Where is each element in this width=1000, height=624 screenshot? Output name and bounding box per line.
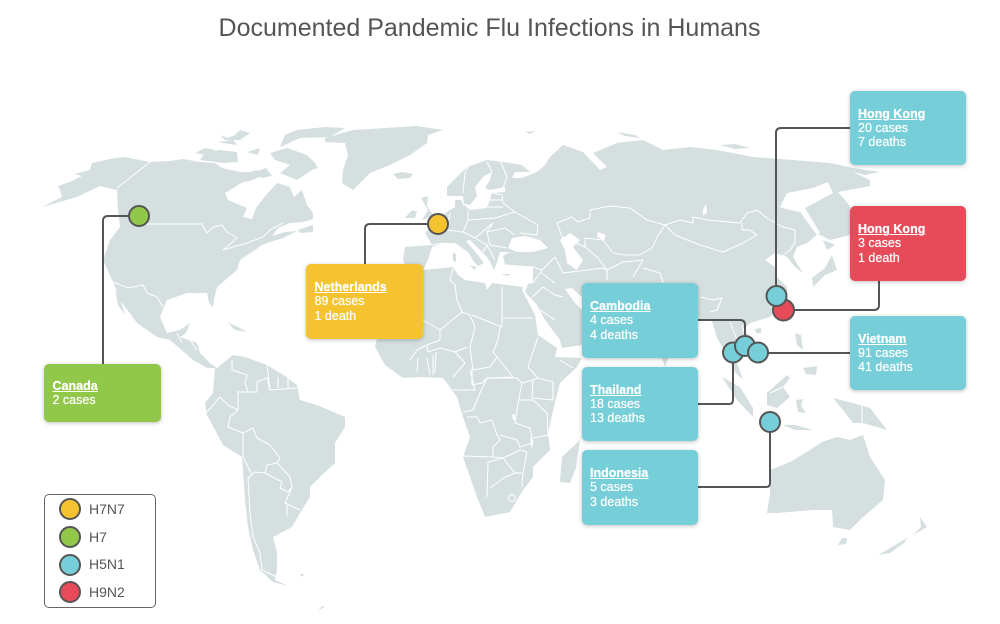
connector: Indonesia [698,422,770,487]
marker: Hong Kong H5N1 [766,286,786,306]
connector: Netherlands [365,224,438,264]
callout: Cambodia [582,283,698,358]
callout: Hong Kong H5N1: 7 deaths [858,135,906,149]
legend entries [59,498,125,603]
callout: Hong Kong H9N2: 1 death [858,251,900,265]
callout: Thailand: Thailand [590,383,641,397]
callout: Hong Kong H9N2: Hong Kong [858,222,925,236]
callout: Cambodia: Cambodia [590,299,650,313]
callout: Vietnam: 91 cases [858,346,908,360]
legend swatch: H9N2 [60,582,80,602]
callout: Indonesia: 5 cases [590,480,633,494]
marker: Vietnam H5N1 [748,342,768,362]
callout: Hong Kong H5N1: Hong Kong [858,107,925,121]
legend label: H5N1: H5N1 [89,556,125,572]
legend label: H9N2: H9N2 [89,584,125,600]
marker: Netherlands H7N7 [428,214,448,234]
callout: Netherlands: 1 death [314,309,356,323]
Africa [375,267,582,517]
callout: Canada [44,364,160,422]
callout: Netherlands: Netherlands [314,280,387,294]
marker: Hong Kong H9N2 [773,300,794,320]
callout: Cambodia: 4 cases [590,313,633,327]
callout: Indonesia: 3 deaths [590,495,638,509]
title: Documented Pandemic Flu Infections in Humans [219,14,760,42]
connector: Canada [103,216,139,364]
callout: Netherlands: 89 cases [314,294,365,308]
marker: Thailand H5N1 [723,342,743,362]
legend swatch: H7N7 [60,499,80,519]
callout: Hong Kong H9N2: 3 cases [858,236,901,250]
callout: Hong Kong H5N1 [850,91,966,165]
connector: Vietnam [758,352,850,354]
marker: Indonesia H5N1 [760,412,780,432]
callout: Thailand: 18 cases [590,397,640,411]
Eurasia [403,140,880,380]
callout: Vietnam: Vietnam [858,332,906,346]
callout: Cambodia: 4 deaths [590,328,638,342]
country borders [113,160,862,577]
legend label: H7: H7 [89,529,107,545]
callout: Canada: 2 cases [52,393,96,407]
connector: Hong Kong H5N1 [776,128,850,296]
connector: Thailand [698,352,733,404]
world map landmasses [42,126,927,611]
connector: Cambodia [698,320,745,347]
legend label: H7N7: H7N7 [89,501,125,517]
callout: Hong Kong H9N2 [850,206,966,281]
marker: Cambodia H5N1 [735,336,755,356]
callout: Indonesia [582,450,698,525]
callout: Vietnam: 41 deaths [858,360,913,374]
connector: Hong Kong H9N2 [783,281,879,310]
legend swatch: H5N1 [60,555,80,575]
callout: Netherlands [306,264,422,339]
callout: Vietnam [850,316,966,390]
legend swatch: H7 [60,527,80,547]
callout: Thailand: 13 deaths [590,411,645,425]
callout: Hong Kong H5N1: 20 cases [858,121,908,135]
callout: Indonesia: Indonesia [590,466,648,480]
legend [44,494,156,608]
callout: Thailand [582,367,698,441]
callout: Canada: Canada [52,379,98,393]
marker: Canada H7 [129,206,149,226]
seas and inland water [462,172,833,448]
